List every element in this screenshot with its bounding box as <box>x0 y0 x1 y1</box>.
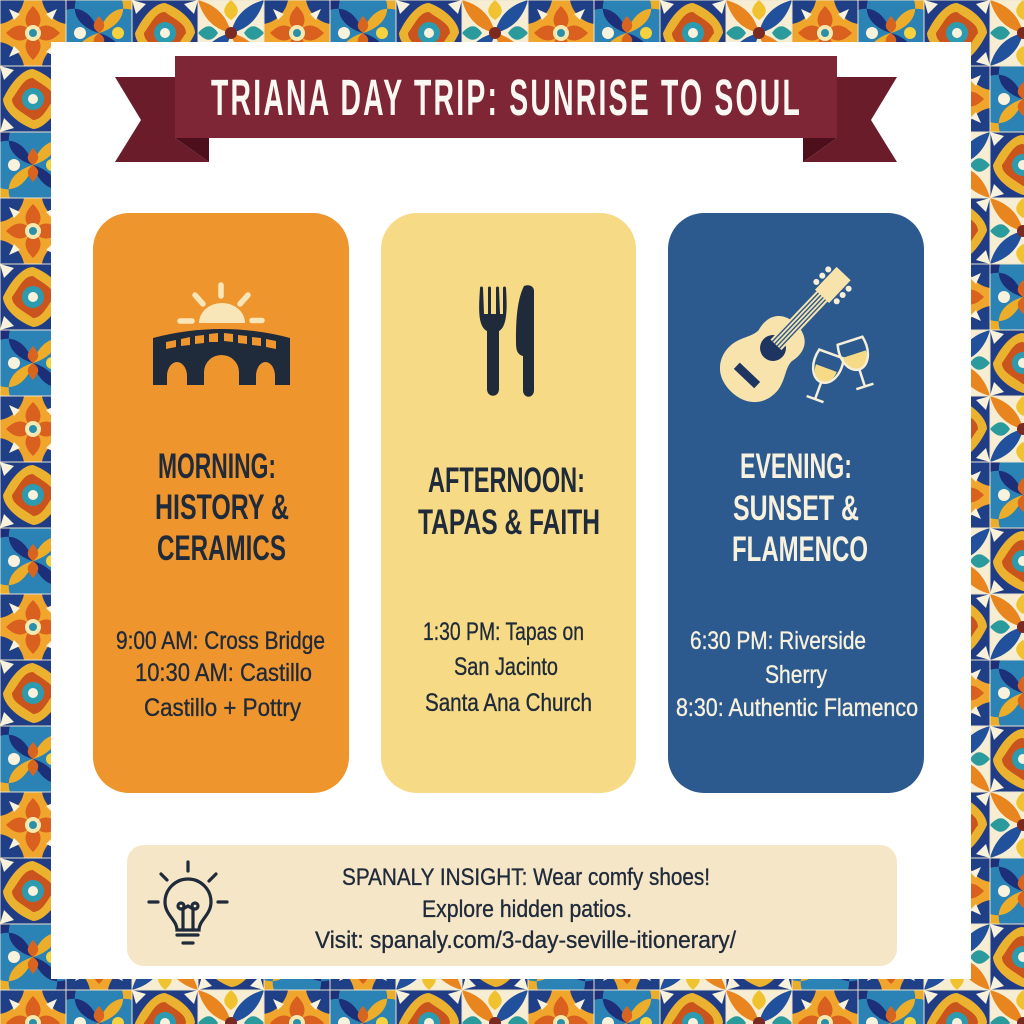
icon: fork and knife <box>479 285 534 397</box>
morning heading: HISTORY & <box>155 488 289 527</box>
ribbon band <box>175 56 837 138</box>
evening heading: EVENING: <box>740 447 852 486</box>
evening schedule: 6:30 PM: Riverside <box>690 627 866 655</box>
afternoon heading: AFTERNOON: <box>428 461 585 500</box>
icon: right wine glass <box>837 336 878 391</box>
morning heading <box>155 447 289 568</box>
evening schedule <box>676 627 918 722</box>
insight background <box>127 845 897 966</box>
title ribbon <box>115 56 897 162</box>
icon: light bulb <box>149 862 227 943</box>
icon: sun over bridge <box>153 285 290 385</box>
evening background <box>668 213 924 793</box>
afternoon background <box>381 213 636 793</box>
evening schedule: Sherry <box>765 661 827 689</box>
afternoon schedule <box>423 618 592 717</box>
morning heading: MORNING: <box>158 447 276 486</box>
morning schedule: 9:00 AM: Cross Bridge <box>116 627 325 655</box>
ribbon right tail <box>803 77 897 162</box>
afternoon schedule: 1:30 PM: Tapas on <box>423 618 584 646</box>
afternoon heading: TAPAS & FAITH <box>418 503 600 542</box>
icon: guitar <box>708 251 867 414</box>
morning schedule: Castillo + Pottry <box>144 694 301 722</box>
insight text: Explore hidden patios. <box>422 896 632 923</box>
morning heading: CERAMICS <box>157 529 286 568</box>
panel: insight <box>127 845 897 966</box>
morning schedule: 10:30 AM: Castillo <box>135 659 312 687</box>
ribbon left tail <box>115 77 209 162</box>
evening schedule: 8:30: Authentic Flamenco <box>676 694 918 722</box>
icon: left wine glass <box>802 349 845 404</box>
insight text: Visit: spanaly.com/3-day-seville-itionerary/ <box>315 927 736 954</box>
ribbon left fold <box>175 138 209 162</box>
ribbon right fold <box>803 138 837 162</box>
evening heading: FLAMENCO <box>732 530 868 569</box>
morning background <box>93 213 349 793</box>
insight text <box>315 864 736 954</box>
evening heading <box>732 447 868 569</box>
panel: evening <box>668 213 924 793</box>
afternoon heading <box>418 461 600 542</box>
panel: afternoon <box>381 213 636 793</box>
evening heading: SUNSET & <box>733 489 859 528</box>
afternoon schedule: Santa Ana Church <box>425 689 592 717</box>
insight text: SPANALY INSIGHT: Wear comfy shoes! <box>342 864 710 891</box>
panel: morning <box>93 213 349 793</box>
morning schedule <box>116 627 325 722</box>
afternoon schedule: San Jacinto <box>454 653 558 681</box>
